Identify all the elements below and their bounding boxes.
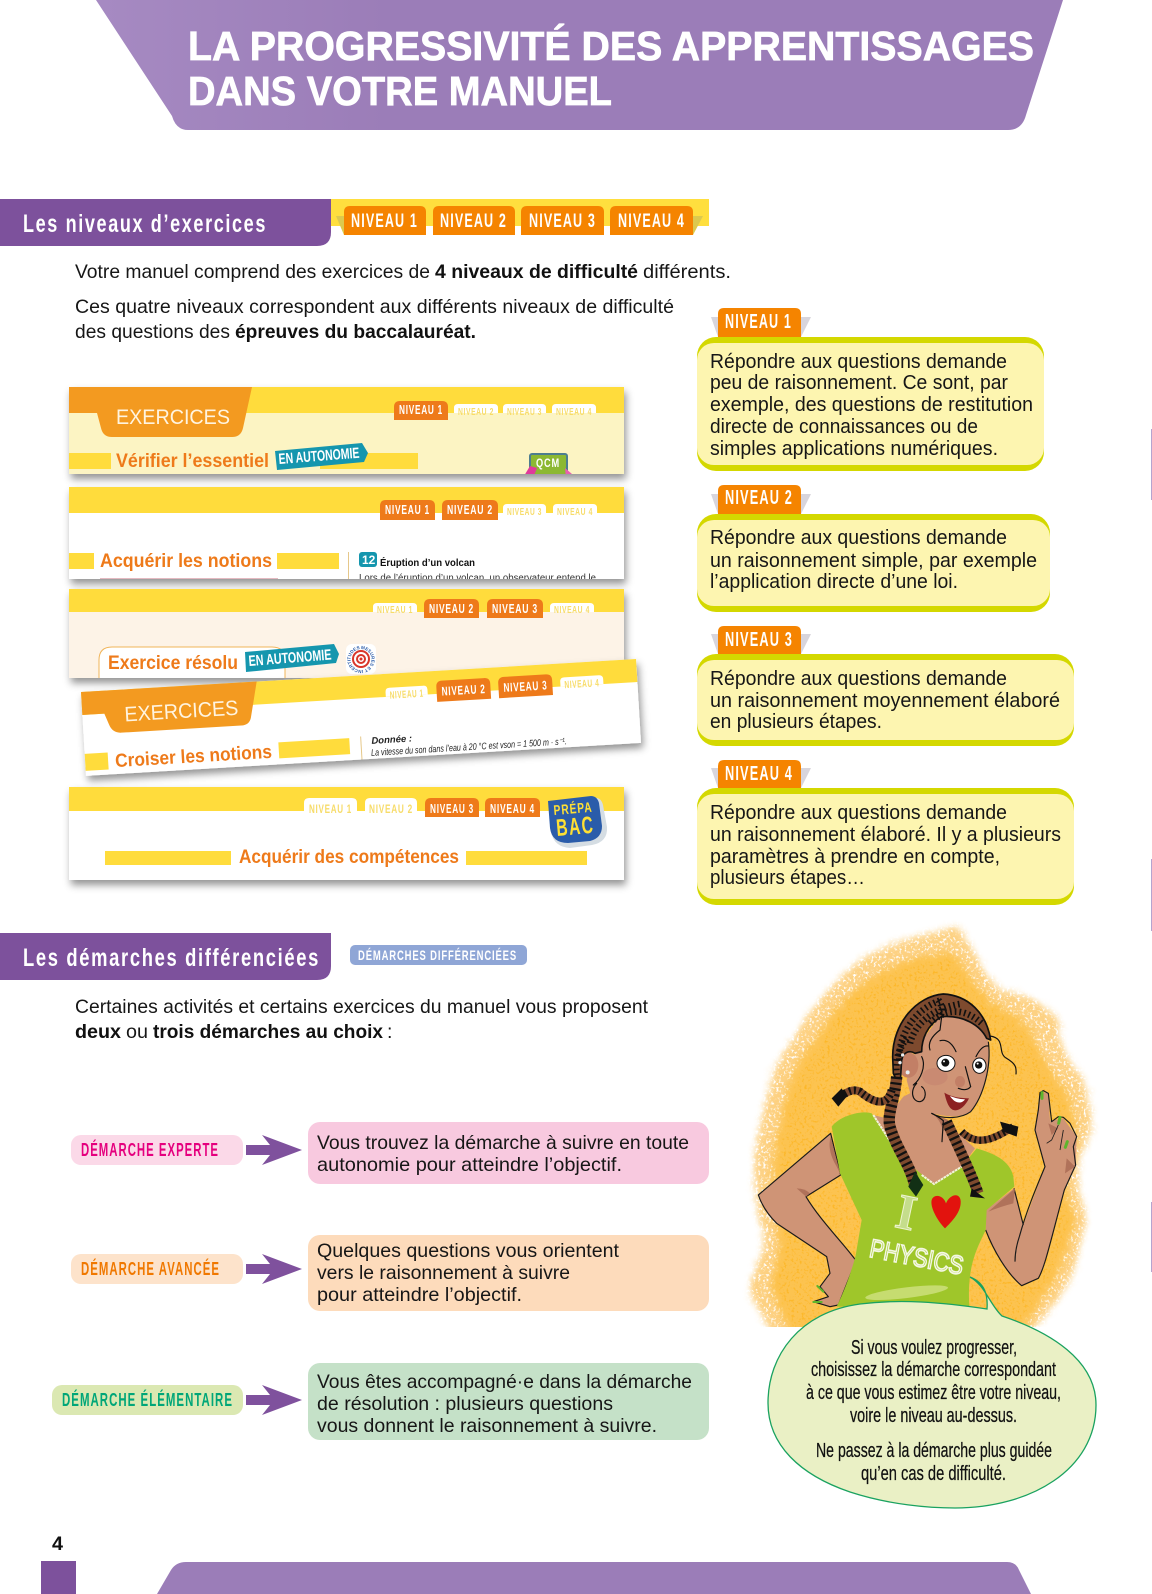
panel: niveau 1: peu de raisonnement. Ce sont, par — [710, 372, 1008, 394]
row: démarche avancée: vers le raisonnement à suivre — [317, 1262, 570, 1284]
panel: niveau 1: NIVEAU 1 — [725, 311, 792, 333]
panel: niveau 2: NIVEAU 2 — [725, 487, 793, 509]
sample header: croiser les notions (tilted): NIVEAU 2 — [441, 682, 486, 699]
speech bubble: Ne passez à la démarche plus guidée — [816, 1440, 1052, 1462]
icon: QCM — [525, 453, 572, 474]
sample header: croiser les notions (tilted) — [81, 659, 641, 776]
démarches intro text: : — [387, 1021, 392, 1043]
chip: démarches différenciées: DÉMARCHES DIFFÉRENCIÉES — [358, 947, 517, 963]
section heading: les démarches différenciées — [0, 933, 331, 980]
sample header: acquérir les notions: NIVEAU 3 — [507, 506, 542, 518]
title: DANS VOTRE MANUEL — [188, 68, 612, 114]
sample header: vérifier l'essentiel: EN AUTONOMIE — [278, 445, 360, 468]
sample header: acquérir les notions: NIVEAU 2 — [447, 503, 493, 517]
sample header: exercice résolu — [66, 588, 632, 688]
speech bubble: qu’en cas de difficulté. — [861, 1463, 1006, 1485]
braids — [832, 1077, 1018, 1198]
row: démarche avancée: DÉMARCHE AVANCÉE — [81, 1258, 220, 1279]
panel: niveau 1: simples applications numériques. — [710, 438, 998, 460]
head — [907, 1015, 989, 1116]
level tabs strip: NIVEAU 3 — [529, 211, 596, 232]
sample header: vérifier l'essentiel: EXERCICES — [116, 406, 230, 429]
intro text: des questions des — [75, 321, 230, 343]
sample header: acquérir les notions: Éruption d’un volcan — [380, 556, 475, 569]
level tabs strip: NIVEAU 4 — [618, 211, 685, 232]
panel: niveau 1: Répondre aux questions demande — [710, 351, 1007, 373]
title banner — [96, 0, 1063, 130]
row: démarche experte: DÉMARCHE EXPERTE — [81, 1139, 219, 1160]
arrow — [246, 1385, 302, 1415]
row: démarche experte — [71, 1122, 709, 1184]
panel: niveau 3: Répondre aux questions demande — [710, 668, 1007, 690]
sample header: exercice résolu: NIVEAU 2 — [429, 602, 474, 616]
chip: démarches différenciées — [350, 945, 527, 965]
sample header: acquérir des compétences — [69, 787, 624, 880]
sample header: exercice résolu: EN AUTONOMIE — [248, 647, 332, 670]
intro text: différents. — [643, 261, 731, 283]
icon: QCM: QCM — [536, 456, 560, 470]
sample header: vérifier l'essentiel: Vérifier l’essentiel — [116, 451, 269, 472]
démarches intro text: deux — [75, 1021, 121, 1043]
intro text: Ces quatre niveaux correspondent aux différents niveaux de difficulté — [75, 296, 674, 318]
badge: prépa bac — [548, 796, 607, 848]
title — [188, 23, 1034, 114]
panel: niveau 1 — [697, 308, 1044, 471]
badge: prépa bac: BAC — [555, 812, 595, 842]
panel: niveau 2: Répondre aux questions demande — [710, 527, 1007, 549]
shirt lettering: I — [891, 1183, 922, 1241]
sample header: croiser les notions (tilted): Croiser les notions — [115, 742, 273, 772]
intro text: 4 niveaux de difficulté — [435, 261, 638, 283]
intro text — [75, 261, 731, 343]
panel: niveau 1: directe de connaissances ou de — [710, 416, 978, 438]
sample header: acquérir les notions: Lors de l’éruption d’un volcan, un observateur entend le — [359, 573, 596, 584]
row: démarche experte: autonomie pour atteindre l’objectif. — [317, 1154, 622, 1176]
page number: 4 — [52, 1534, 63, 1555]
sample header: exercice résolu: NIVEAU 1 — [377, 604, 413, 616]
panel: niveau 3: un raisonnement moyennement élaboré — [710, 690, 1060, 712]
illustration: girl with physics t-shirt: PHYSICS — [867, 1233, 966, 1281]
sample header: exercice résolu: NIVEAU 4 — [554, 604, 590, 616]
panel: niveau 2 — [697, 485, 1050, 612]
t-shirt — [832, 1112, 1014, 1307]
sample header: croiser les notions (tilted): EXERCICES — [124, 697, 239, 726]
intro text: Votre manuel comprend des exercices de — [75, 261, 430, 283]
panel: niveau 1: exemple, des questions de restitution — [710, 394, 1033, 416]
sample header: vérifier l'essentiel: NIVEAU 3 — [507, 406, 542, 418]
panel: niveau 4: plusieurs étapes… — [710, 867, 865, 889]
panel: niveau 4: paramètres à prendre en compte, — [710, 846, 1000, 868]
row: démarche experte: Vous trouvez la démarche à suivre en toute — [317, 1132, 689, 1154]
icon: target: MESURES ET INCERTITUDES — [347, 646, 375, 674]
left arm — [758, 1133, 856, 1307]
sample header: croiser les notions (tilted): NIVEAU 3 — [503, 678, 548, 695]
sample header: croiser les notions (tilted): NIVEAU 1 — [389, 688, 424, 702]
row: démarche élémentaire: vous donnent le raisonnement à suivre. — [317, 1415, 657, 1437]
panel: niveau 4: Répondre aux questions demande — [710, 802, 1007, 824]
panel: niveau 2: l’application directe d’une loi. — [710, 571, 958, 593]
hair — [893, 994, 991, 1087]
neck and chest — [873, 1090, 975, 1184]
démarches intro text: Certaines activités et certains exercices du manuel vous proposent — [75, 996, 649, 1018]
speech bubble: choisissez la démarche correspondant — [811, 1359, 1056, 1381]
panel: niveau 4: NIVEAU 4 — [725, 763, 793, 785]
sample header: acquérir des compétences: NIVEAU 1 — [309, 802, 352, 816]
right arm — [986, 1091, 1077, 1286]
face details — [913, 1017, 1016, 1142]
level tabs strip: NIVEAU 1 — [351, 211, 418, 232]
sample header: exercice résolu: NIVEAU 3 — [492, 602, 538, 616]
sample header: acquérir les notions: NIVEAU 4 — [557, 506, 593, 518]
row: démarche élémentaire: Vous êtes accompagné·e dans la démarche — [317, 1371, 692, 1393]
sample header: croiser les notions (tilted): NIVEAU 4 — [564, 677, 600, 691]
panel: niveau 3: en plusieurs étapes. — [710, 711, 882, 733]
row: démarche avancée — [71, 1235, 709, 1311]
section heading: les niveaux d'exercices: Les niveaux d’exercices — [23, 210, 267, 238]
section heading: les niveaux d'exercices — [0, 199, 331, 246]
page number — [41, 1534, 76, 1594]
sample header: croiser les notions (tilted): Donnée : — [371, 733, 412, 747]
row: démarche élémentaire — [52, 1363, 709, 1440]
row: démarche élémentaire: DÉMARCHE ÉLÉMENTAIRE — [62, 1389, 233, 1410]
speech bubble — [768, 1277, 1096, 1508]
row: démarche avancée: pour atteindre l’objectif. — [317, 1284, 522, 1306]
orange paint blob — [750, 927, 1091, 1337]
intro text: épreuves du baccalauréat. — [235, 321, 476, 343]
démarches intro text — [75, 996, 649, 1043]
panel: niveau 4 — [697, 760, 1074, 905]
title: LA PROGRESSIVITÉ DES APPRENTISSAGES — [188, 23, 1034, 69]
sample header: acquérir les notions: NIVEAU 1 — [385, 503, 430, 517]
démarches intro text: ou — [126, 1021, 148, 1043]
sample header: vérifier l'essentiel: NIVEAU 1 — [399, 403, 443, 417]
speech bubble: Si vous voulez progresser, — [851, 1337, 1017, 1359]
sample header: acquérir des compétences: NIVEAU 4 — [490, 802, 535, 816]
sample header: acquérir les notions: Acquérir les notions — [100, 551, 272, 572]
sample header: acquérir des compétences: NIVEAU 2 — [369, 802, 413, 816]
sample header: acquérir les notions — [69, 487, 624, 584]
illustration: girl with physics t-shirt — [750, 927, 1091, 1337]
sample header: exercice résolu: Exercice résolu — [108, 653, 238, 674]
panel: niveau 4: un raisonnement élaboré. Il y a plusieurs — [710, 824, 1061, 846]
arrow — [246, 1254, 302, 1284]
panel: niveau 3: NIVEAU 3 — [725, 629, 793, 651]
panel: niveau 2: un raisonnement simple, par exemple — [710, 550, 1037, 572]
row: démarche avancée: Quelques questions vous orientent — [317, 1240, 620, 1262]
sample header: acquérir les notions: 12 — [362, 553, 376, 567]
section heading: les démarches différenciées: Les démarches différenciées — [23, 944, 320, 972]
sample header: acquérir des compétences: Acquérir des compétences — [239, 847, 459, 868]
right edge marks — [1151, 429, 1152, 1272]
speech bubble: voire le niveau au-dessus. — [850, 1405, 1017, 1427]
sample header: acquérir des compétences: NIVEAU 3 — [430, 802, 474, 816]
sample header: croiser les notions (tilted): La vitesse du son dans l’eau à 20 °C est vson = 1 500 m · s⁻¹. — [371, 736, 567, 759]
sample header: vérifier l'essentiel — [69, 387, 624, 478]
démarches intro text: trois démarches au choix — [153, 1021, 383, 1043]
sample header: vérifier l'essentiel: NIVEAU 2 — [458, 406, 494, 418]
sample header: vérifier l'essentiel: NIVEAU 4 — [556, 406, 592, 418]
level tabs strip — [331, 199, 709, 235]
badge: prépa bac: PRÉPA — [553, 799, 593, 818]
level tabs strip: NIVEAU 2 — [440, 211, 507, 232]
panel: niveau 3 — [697, 626, 1074, 746]
heart — [931, 1195, 961, 1228]
row: démarche élémentaire: de résolution : plusieurs questions — [317, 1393, 613, 1415]
footer band — [157, 1562, 1031, 1594]
arrow — [246, 1135, 302, 1165]
